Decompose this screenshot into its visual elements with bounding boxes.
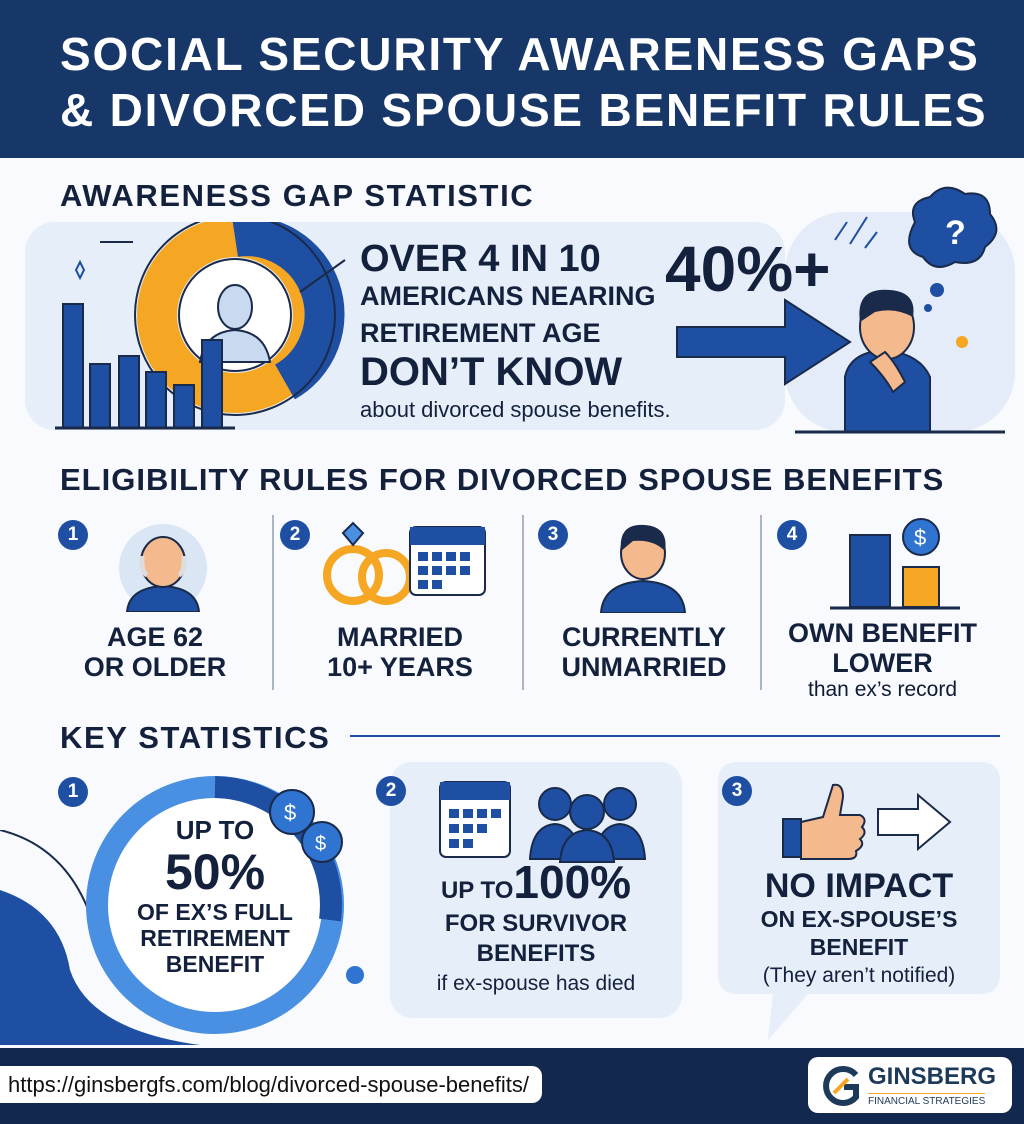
rule 4: own benefit lower: LOWER: [832, 648, 933, 678]
stat 1: up to 50%: $: [315, 833, 326, 855]
text: over 4 in 10: RETIREMENT AGE: [360, 318, 601, 348]
stat 2: up to 100%: UP TO100%: [441, 856, 631, 908]
rule 4: own benefit lower: 4: [787, 524, 797, 545]
stat 1: up to 50%: 1: [68, 781, 78, 802]
text: over 4 in 10: AMERICANS NEARING: [360, 281, 656, 311]
stat 1: up to 50%: BENEFIT: [166, 951, 264, 977]
rule 2: married: 2: [290, 524, 300, 545]
stat 1: up to 50%: 50%: [165, 844, 265, 900]
heading: eligibility rules: ELIGIBILITY RULES FOR DIVORCED SPOUSE BENEFITS: [60, 462, 944, 497]
text: over 4 in 10: about divorced spouse benefits.: [360, 397, 671, 422]
rule 2: married: MARRIED: [337, 622, 463, 652]
icon: thinking person: [795, 186, 1005, 434]
chart: donut and bars: [55, 222, 346, 430]
text: over 4 in 10: [360, 238, 671, 422]
footer: [0, 1048, 1024, 1124]
arrow: [676, 298, 852, 386]
text: over 4 in 10: OVER 4 IN 10: [360, 238, 601, 280]
rule 2: married: 10+ YEARS: [327, 652, 473, 682]
stat 2: up to 100%: FOR SURVIVOR: [445, 910, 627, 937]
stat 2: up to 100%: [390, 762, 682, 1018]
rule 3: unmarried: UNMARRIED: [562, 652, 726, 682]
rule 3: unmarried: 3: [548, 524, 558, 545]
rule 1: age: 1: [68, 524, 78, 545]
logo: GINSBERG: [868, 1063, 996, 1090]
rule 1: age: AGE 62: [107, 622, 203, 652]
panel: awareness gap: [25, 186, 1015, 434]
icon: thinking person: ?: [945, 214, 966, 252]
stat 3: no impact: (They aren’t notified): [763, 964, 955, 987]
logo: [808, 1057, 1012, 1113]
title: & DIVORCED SPOUSE BENEFIT RULES: [60, 84, 987, 136]
rule 4: own benefit lower: $: [914, 525, 926, 550]
rule 4: own benefit lower: OWN BENEFIT: [788, 618, 977, 648]
title: [60, 28, 987, 136]
logo: FINANCIAL STRATEGIES: [868, 1096, 985, 1107]
header banner: [0, 0, 1024, 158]
stat 3: no impact: 3: [732, 780, 742, 801]
url: https://ginsbergfs.com/blog/divorced-spouse-benefits/: [8, 1072, 529, 1097]
rule 4: own benefit lower: than ex’s record: [808, 678, 957, 701]
stat 2: up to 100%: if ex-spouse has died: [437, 972, 635, 995]
stat 3: no impact: ON EX-SPOUSE’S: [761, 906, 957, 932]
decorative blue blob: [0, 830, 200, 1045]
stat 1: up to 50%: [58, 776, 364, 1034]
stat 1: up to 50%: UP TO: [176, 815, 254, 845]
rule 3: unmarried: CURRENTLY: [562, 622, 726, 652]
text: over 4 in 10: DON’T KNOW: [360, 350, 622, 394]
stat 2: up to 100%: 2: [386, 780, 396, 801]
heading: awareness gap: AWARENESS GAP STATISTIC: [60, 178, 534, 213]
stat 1: up to 50%: RETIREMENT: [140, 925, 290, 951]
stat: 40%+: 40%+: [665, 233, 830, 305]
stat 2: up to 100%: BENEFITS: [477, 940, 595, 967]
rule 2: married: [280, 520, 486, 682]
stat 1: up to 50%: $: [284, 800, 296, 825]
title: SOCIAL SECURITY AWARENESS GAPS: [60, 28, 980, 80]
rule 3: unmarried: [538, 520, 726, 682]
heading: key statistics: KEY STATISTICS: [60, 720, 330, 755]
panel: eligibility rules: [58, 515, 977, 701]
stat 3: no impact: BENEFIT: [810, 934, 908, 960]
rule 1: age: OR OLDER: [84, 652, 226, 682]
url: [0, 1066, 542, 1103]
rule 1: age: [58, 520, 226, 682]
stat 1: up to 50%: OF EX’S FULL: [137, 899, 293, 925]
stat 3: no impact: NO IMPACT: [765, 867, 953, 905]
stat 3: no impact: [718, 762, 1000, 1040]
rule 4: own benefit lower: [777, 518, 977, 701]
